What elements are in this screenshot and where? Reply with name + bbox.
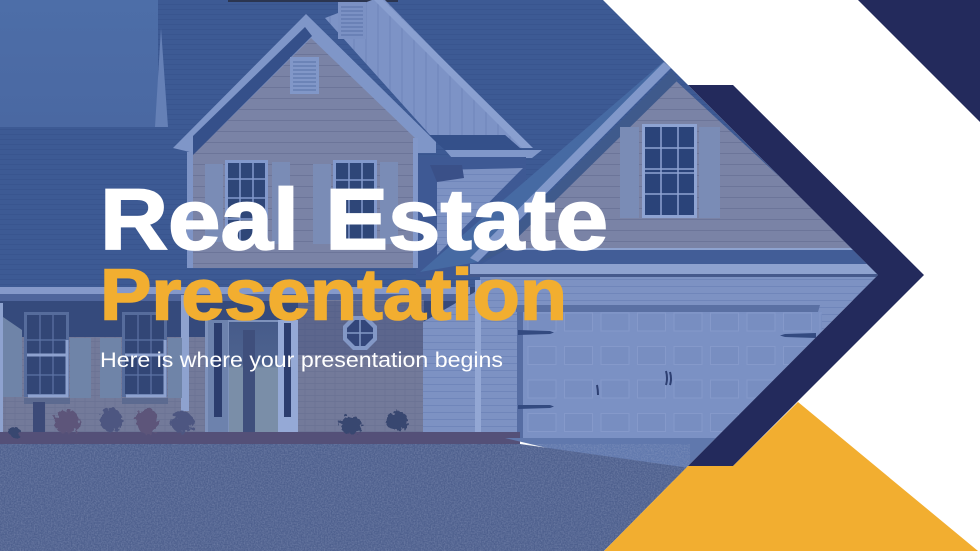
garage door bbox=[522, 311, 822, 438]
title: Real Estate: Real Estate bbox=[100, 172, 608, 268]
shape: yellow triangle bbox=[604, 402, 978, 551]
title: Presentation: Presentation bbox=[100, 256, 567, 336]
roof sliver bbox=[155, 28, 168, 127]
garage jamb bbox=[517, 312, 523, 438]
dormer wall bottom line bbox=[510, 248, 860, 250]
gable vent bbox=[290, 57, 319, 94]
dormer shutters bbox=[620, 127, 720, 218]
side wall bbox=[423, 292, 475, 433]
small roof trim bbox=[445, 150, 542, 158]
shape: navy chevron bbox=[688, 85, 924, 466]
front gable siding bbox=[193, 38, 415, 268]
dormer trim bbox=[470, 62, 671, 262]
back gable vent bbox=[338, 2, 366, 39]
left wall trim bbox=[187, 152, 193, 268]
porch sills bbox=[24, 398, 168, 404]
entry door frame bbox=[205, 320, 298, 432]
dark wall under small roof bbox=[451, 157, 526, 158]
upper window left bbox=[225, 160, 268, 244]
porch shutters bbox=[3, 317, 182, 398]
dormer shadow band bbox=[487, 80, 676, 258]
door handles bbox=[597, 371, 671, 395]
lawn grain texture bbox=[0, 444, 690, 551]
garage roof strip bbox=[526, 250, 868, 265]
porch window right bbox=[122, 312, 167, 397]
mulch bed bbox=[0, 432, 520, 444]
porch post bbox=[33, 402, 45, 434]
back gable boards bbox=[325, 0, 530, 148]
shrubs bbox=[9, 408, 408, 437]
garage roof trim bbox=[470, 264, 880, 274]
brick wall right bbox=[298, 300, 424, 433]
back gable trim bbox=[374, 0, 533, 148]
dormer window bbox=[642, 124, 697, 218]
front wall below eave bbox=[0, 287, 475, 337]
porch trim bbox=[0, 287, 470, 294]
garage wall bbox=[480, 277, 880, 440]
subtitle: Here is where your presentation begins bbox=[100, 349, 503, 372]
lawn bbox=[0, 444, 690, 551]
boards under small roof bbox=[437, 168, 523, 255]
brick shadow under eave bbox=[298, 301, 424, 355]
porch window left bbox=[24, 312, 69, 397]
roof strip to dormer bbox=[420, 62, 670, 272]
right wall trim bbox=[413, 138, 418, 268]
upper window right bbox=[333, 160, 377, 244]
dormer siding bbox=[505, 82, 851, 250]
porch column bbox=[181, 295, 189, 411]
garage hinges bbox=[518, 330, 816, 409]
sky area bbox=[0, 0, 158, 127]
tree tops at upper edge bbox=[228, 0, 398, 2]
shadow on boards bbox=[430, 165, 464, 182]
front gable shadow bbox=[193, 27, 312, 159]
roof backdrop bbox=[0, 0, 878, 300]
driveway bbox=[505, 438, 880, 551]
front gable trim bbox=[173, 14, 436, 153]
brick wall left bbox=[0, 337, 205, 433]
shape: navy corner top right bbox=[858, 0, 980, 122]
corner columns bbox=[475, 280, 481, 435]
octagon window bbox=[343, 316, 377, 350]
small porch roof over entry bbox=[428, 135, 522, 150]
left roof shadow line bbox=[526, 274, 878, 277]
garage door lintel bbox=[516, 305, 820, 312]
shutters upper left bbox=[205, 162, 398, 244]
